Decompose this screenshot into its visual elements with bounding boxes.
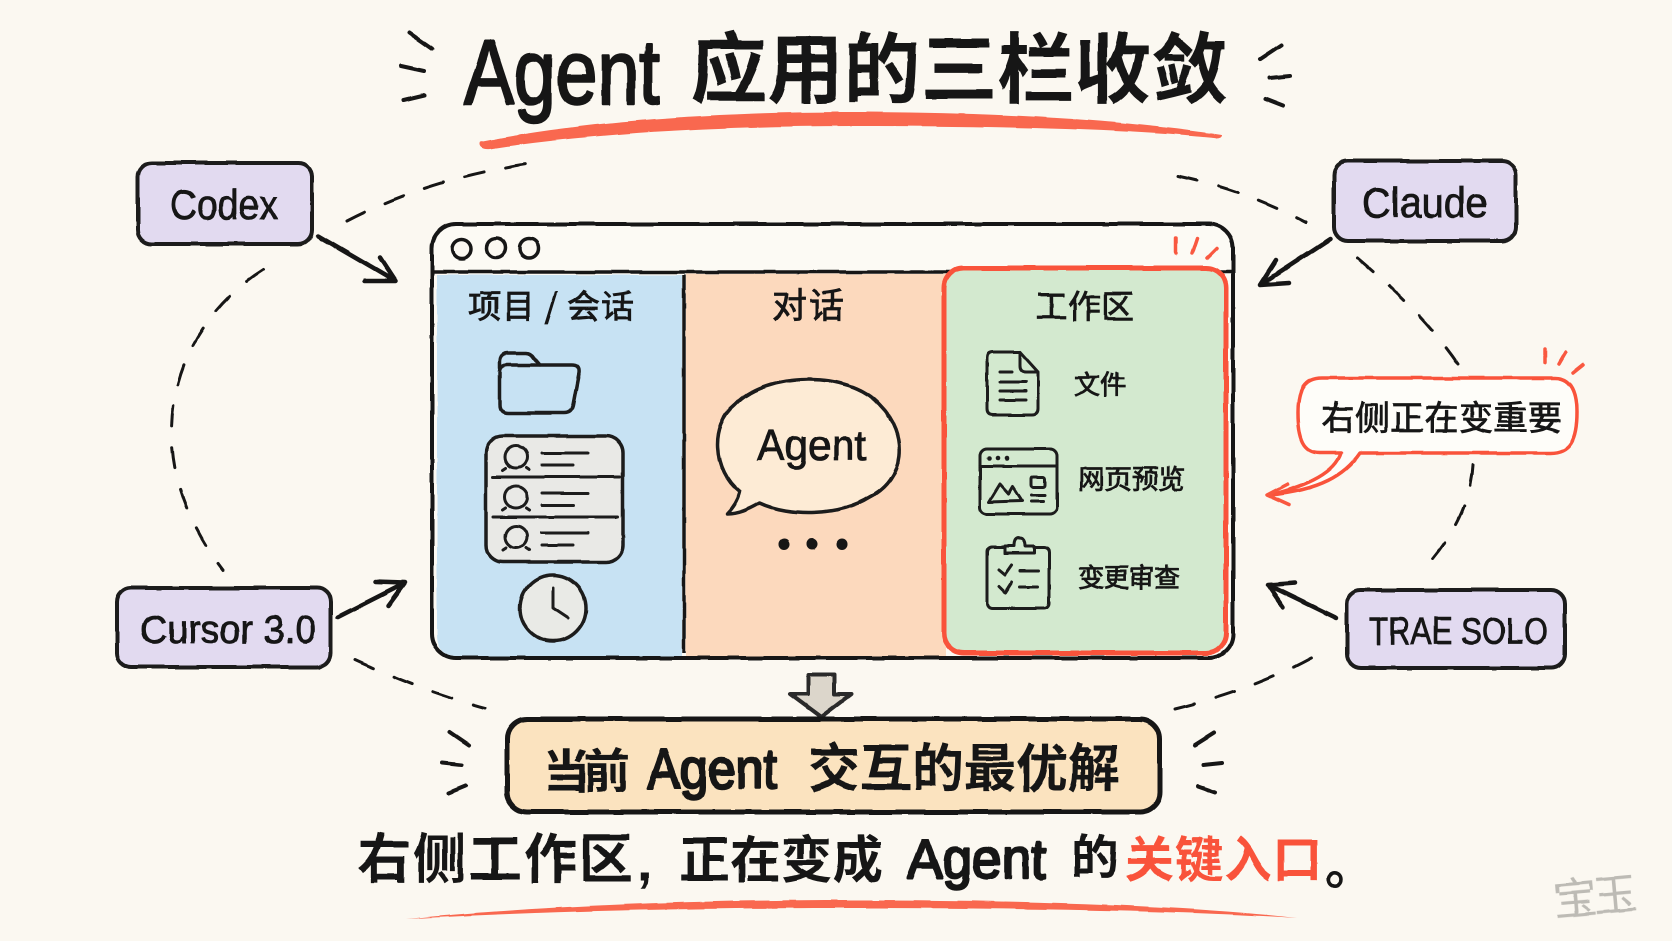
watermark: 宝玉 (1550, 857, 1639, 929)
heading: projects: 项目 / 会话 (468, 280, 634, 328)
conclusion sentence: Agent (907, 827, 1046, 890)
callout: right side is becoming important: 右侧正在变重要 (1321, 391, 1562, 440)
result box: 当前 (543, 733, 630, 802)
title (464, 9, 1228, 124)
conclusion sentence: 正在变成 (679, 819, 883, 893)
callout sparks (1545, 349, 1583, 373)
conclusion sentence (357, 815, 1375, 899)
tag: Codex (138, 163, 312, 244)
tag: Codex: Codex (170, 181, 278, 228)
tag: TRAE Solo (1347, 590, 1565, 668)
conclusion sentence: 。 (1325, 827, 1375, 899)
heading: conversation: 对话 (772, 278, 844, 329)
result box: Agent (647, 737, 777, 800)
title sparks (401, 33, 1290, 106)
arrow: TRAE to window (1268, 583, 1336, 618)
title: Agent (464, 22, 660, 124)
list card (486, 436, 623, 562)
tag: Cursor 3.0 (117, 588, 331, 667)
tag: TRAE Solo: TRAE SOLO (1369, 611, 1548, 653)
speech bubble (718, 379, 900, 514)
divider and panel: conversation (684, 274, 946, 656)
tag: Claude (1334, 161, 1516, 241)
title: 应用的三栏收敛 (690, 9, 1228, 120)
panel: projects / sessions (437, 275, 682, 656)
conclusion sentence: 关键入口 (1125, 821, 1322, 892)
tag: Cursor 3.0: Cursor 3.0 (140, 608, 316, 652)
ellipsis dots (778, 538, 848, 550)
conclusion underline (406, 900, 1297, 919)
icon: web preview (980, 449, 1057, 514)
callout arrowhead (1267, 484, 1289, 505)
icon: folder (500, 353, 579, 413)
arrow: Cursor to window (338, 582, 405, 617)
conclusion sentence: 右侧工作区 (357, 815, 633, 894)
dashed orbit (172, 163, 1473, 709)
icon: clock (520, 575, 586, 641)
window dots (452, 238, 538, 258)
tag: Claude: Claude (1362, 179, 1488, 226)
callout: right side is becoming important (1267, 349, 1583, 505)
icon: file (987, 352, 1038, 415)
result box: 交互的最优解 (808, 727, 1120, 802)
heading: workspace: 工作区 (1035, 280, 1134, 328)
speech bubble: Agent (757, 421, 866, 470)
app window (432, 224, 1233, 658)
result sparks (442, 732, 1222, 793)
arrow: Codex to window (318, 236, 395, 281)
list rows (503, 446, 588, 550)
icon: review clipboard (987, 538, 1049, 608)
workspace sparks (1176, 238, 1217, 258)
label: change review: 变更审查 (1078, 558, 1180, 595)
arrow: Claude to window (1260, 239, 1330, 285)
panel: workspace (944, 268, 1226, 653)
label: files: 文件 (1074, 365, 1126, 402)
arrow: down to result (790, 675, 851, 717)
result box (507, 719, 1160, 812)
title underline (479, 112, 1222, 149)
conclusion sentence: , (637, 832, 652, 892)
label: web preview: 网页预览 (1078, 458, 1185, 497)
conclusion sentence: 的 (1071, 818, 1119, 888)
